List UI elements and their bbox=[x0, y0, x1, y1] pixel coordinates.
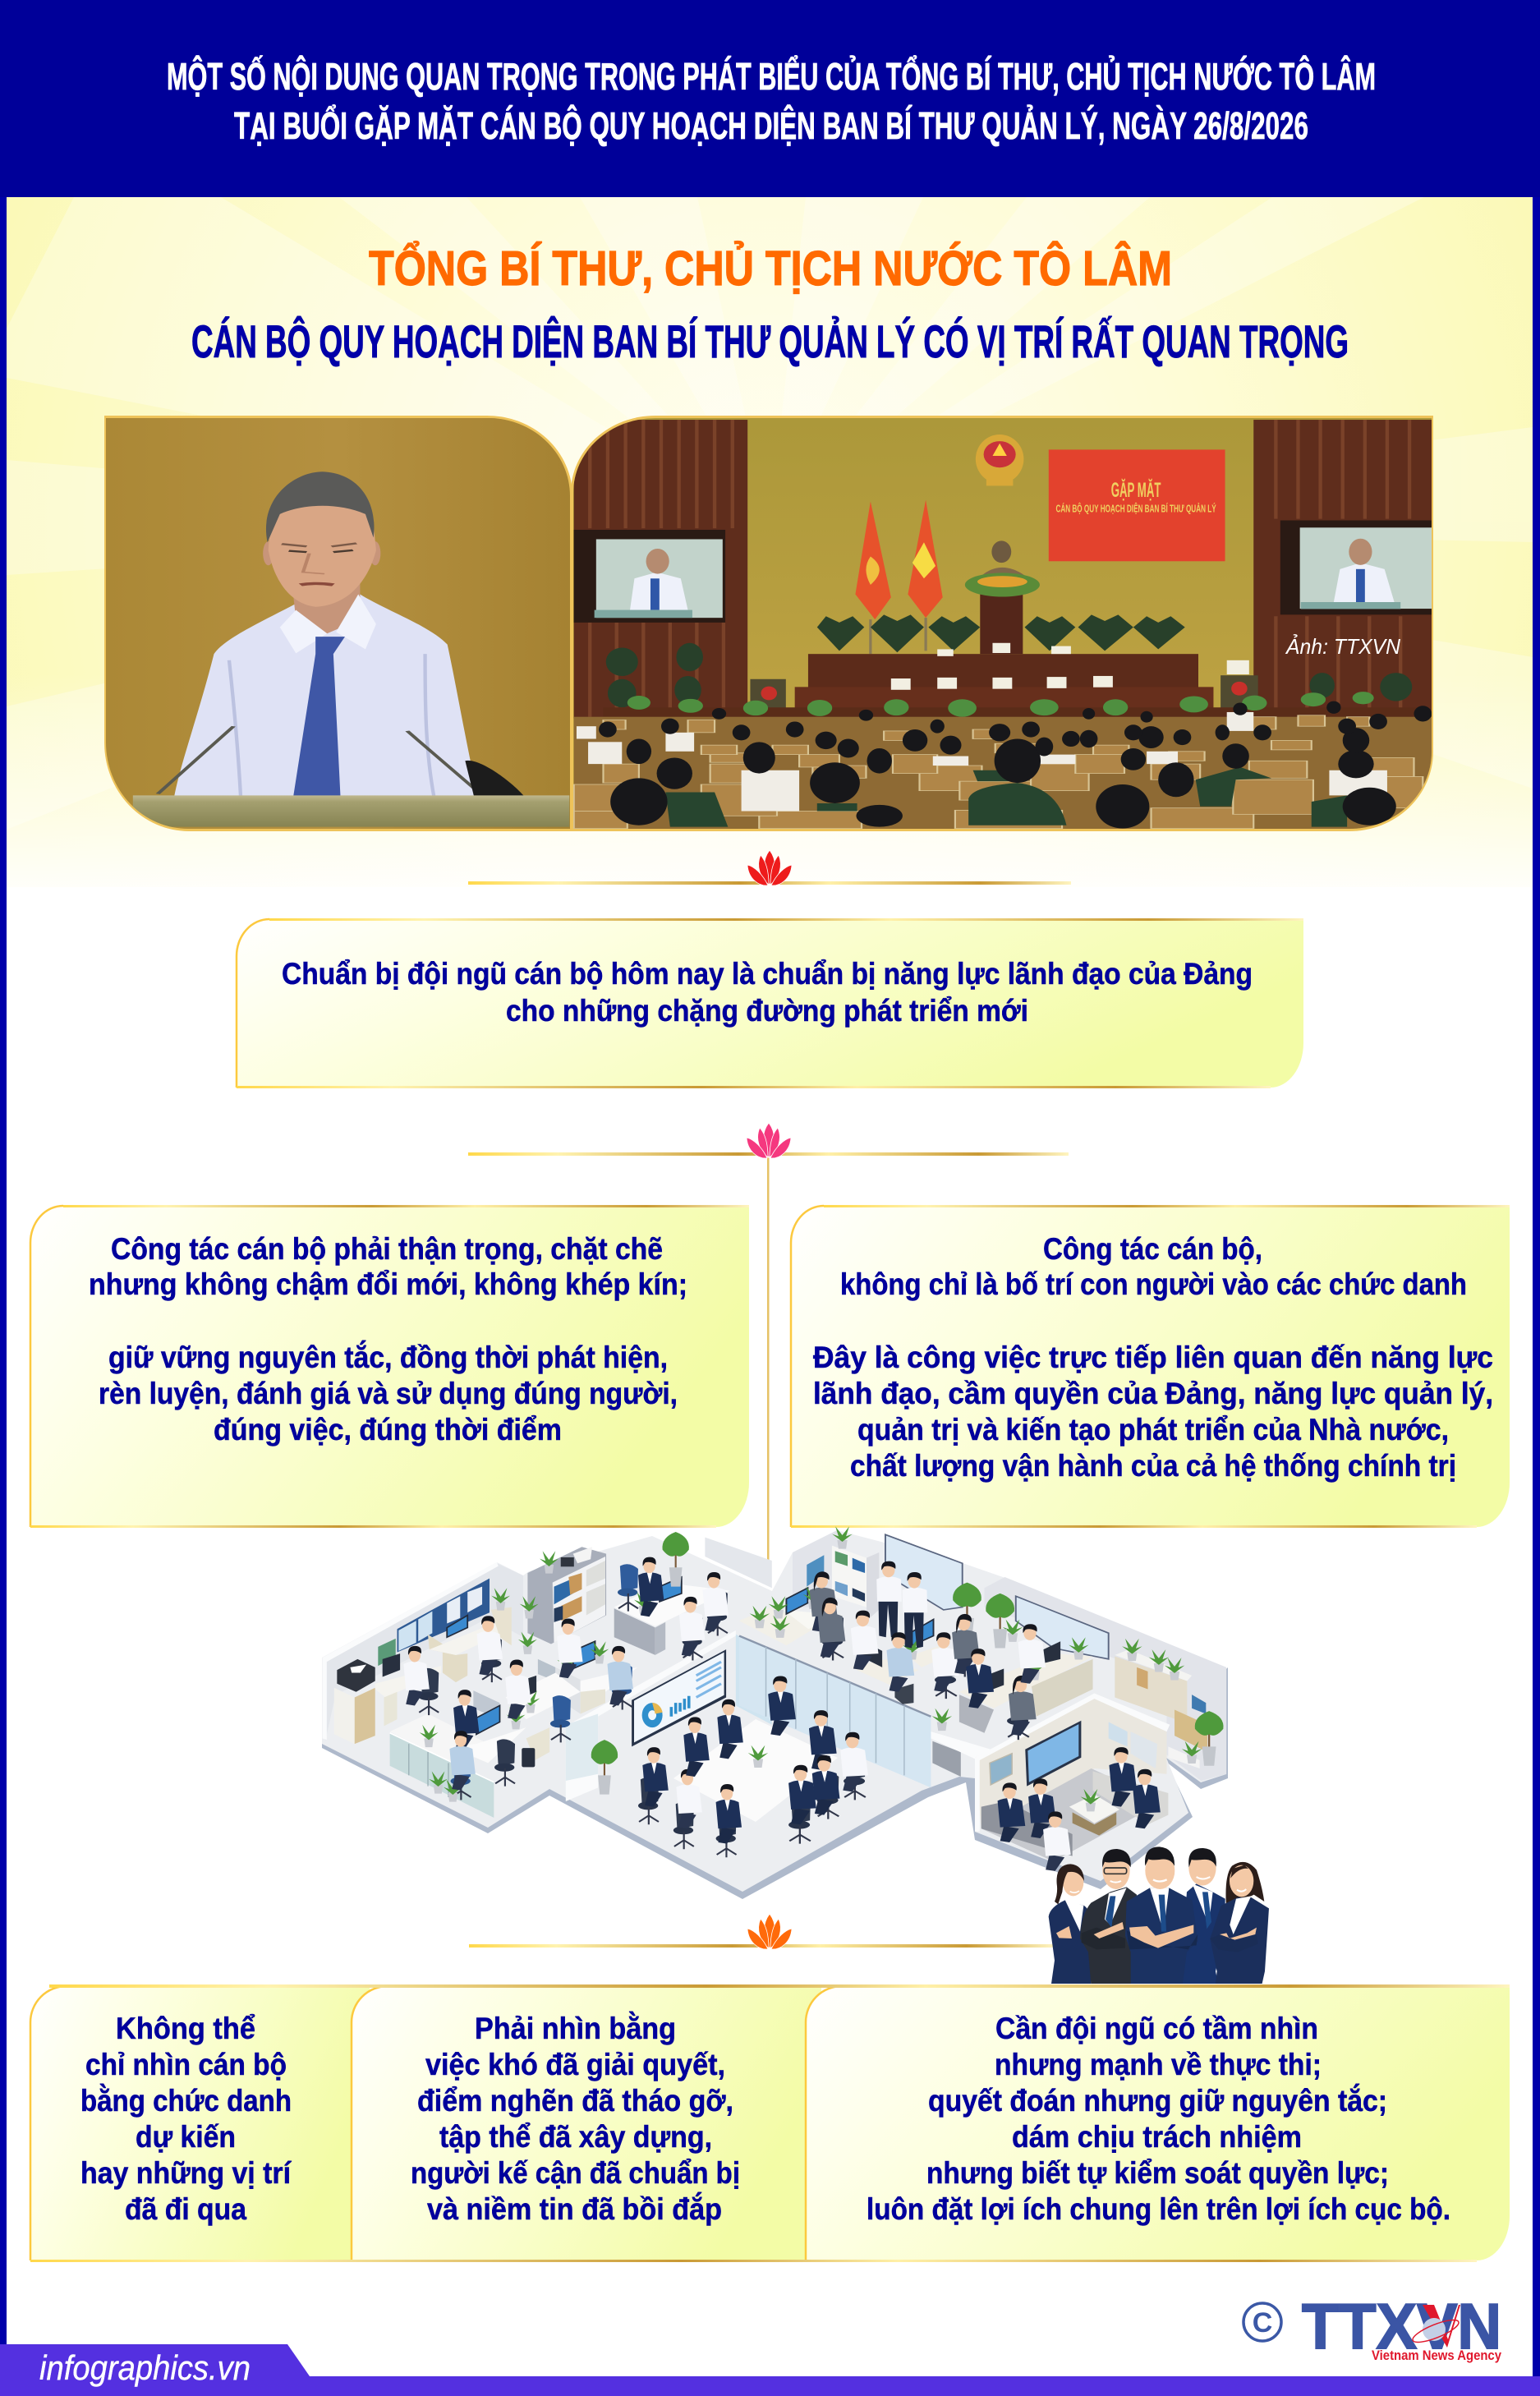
main title: TỔNG BÍ THƯ, CHỦ TỊCH NƯỚC TÔ LÂM bbox=[369, 241, 1172, 296]
lounge shelf bbox=[1115, 1649, 1207, 1768]
back walls bbox=[793, 1530, 1226, 1781]
office floor bbox=[322, 1530, 1226, 1892]
printer and cabinet bbox=[334, 1659, 375, 1744]
man back right bbox=[1180, 1848, 1225, 1984]
man with glasses bbox=[1080, 1849, 1137, 1984]
panel: team needed: nhưng mạnh về thực thi; bbox=[995, 2048, 1322, 2081]
panel: do not judge by title: dự kiến bbox=[136, 2120, 236, 2154]
woman left bbox=[1049, 1864, 1091, 1984]
man center bbox=[1125, 1846, 1198, 1984]
panel: team needed bbox=[806, 1986, 1510, 2260]
footer bar: infographics.vn bbox=[39, 2348, 251, 2387]
panel: left cadre work: đúng việc, đúng thời điểm bbox=[214, 1413, 562, 1446]
filing shelf bbox=[527, 1547, 606, 1644]
left wall bbox=[324, 1563, 523, 1741]
panel: do not judge by title: đã đi qua bbox=[125, 2192, 246, 2226]
lounge room bbox=[975, 1693, 1170, 1861]
logo: copyright mark bbox=[1243, 2303, 1281, 2341]
footer bar bbox=[0, 2344, 1540, 2396]
panel: do not judge by title: bằng chức danh bbox=[80, 2083, 292, 2118]
panel: judge by results: người kế cận đã chuẩn bị bbox=[411, 2156, 740, 2190]
panel: right cadre work: quản trị và kiến tạo phát triển của Nhà nước, bbox=[857, 1413, 1449, 1446]
meeting room staff left bbox=[642, 1699, 743, 1844]
meeting room wall and screen bbox=[566, 1630, 772, 1801]
bust and pillar bbox=[965, 540, 1040, 654]
glass partition bbox=[390, 1733, 494, 1818]
left wing furniture bbox=[322, 1532, 772, 1857]
panel: team needed: Cần đội ngũ có tầm nhìn bbox=[995, 2012, 1318, 2045]
dais bbox=[603, 643, 1418, 720]
panel: left cadre work bbox=[30, 1205, 749, 1528]
wood wall panels bbox=[574, 420, 1437, 719]
panel: left cadre work: rèn luyện, đánh giá và sử dụng đúng người, bbox=[99, 1377, 678, 1410]
right screen bbox=[1280, 521, 1437, 614]
front flowers bbox=[627, 692, 1374, 717]
red banner bbox=[1049, 449, 1225, 561]
glass meeting wall bbox=[739, 1636, 931, 1787]
divider: pink lotus with stem bbox=[468, 1123, 1069, 1561]
panel: judge by results: Phải nhìn bằng bbox=[475, 2011, 676, 2045]
heads bbox=[599, 701, 1432, 829]
monitors bbox=[786, 1588, 934, 1645]
woman right bbox=[1210, 1862, 1269, 1984]
plants bbox=[420, 1532, 767, 1802]
callout: preparing cadres: Chuẩn bị đội ngũ cán bộ hôm nay là chuẩn bị năng lực lãnh đạo của Đảng bbox=[282, 957, 1253, 991]
photo: speaker at podium bbox=[104, 416, 572, 831]
panel: right cadre work: Công tác cán bộ, bbox=[1043, 1232, 1262, 1266]
uniforms bbox=[665, 767, 1347, 827]
work desks bbox=[739, 1607, 1093, 1733]
callout: preparing cadres: cho những chặng đường phát triển mới bbox=[506, 994, 1028, 1028]
divider: red lotus bbox=[468, 850, 1071, 885]
panel: judge by results bbox=[352, 1986, 821, 2260]
photo: assembly hall bbox=[571, 416, 1437, 831]
panel: right cadre work: Đây là công việc trực tiếp liên quan đến năng lực bbox=[813, 1341, 1493, 1374]
red banner: GẶP MẶT bbox=[1111, 478, 1161, 501]
wall screens bbox=[378, 1579, 490, 1666]
staff bbox=[768, 1561, 1161, 1871]
audience floor and desks bbox=[574, 717, 1437, 830]
panel: team needed: dám chịu trách nhiệm bbox=[1012, 2120, 1302, 2154]
meeting table bbox=[673, 1719, 838, 1822]
flags bbox=[855, 500, 943, 654]
illustration: five staff with crossed arms bbox=[1049, 1846, 1269, 1984]
panel: right cadre work: chất lượng vận hành của cả hệ thống chính trị bbox=[850, 1449, 1456, 1483]
divider: orange lotus bbox=[469, 1914, 1054, 1949]
illustration: isometric office bbox=[322, 1526, 1228, 1899]
panel: do not judge by title: hay những vị trí bbox=[80, 2156, 292, 2190]
shirts bbox=[577, 712, 1387, 812]
red banner: CÁN BỘ QUY HOẠCH DIỆN BAN BÍ THƯ QUẢN LÝ bbox=[1055, 502, 1216, 514]
desks bbox=[375, 1607, 637, 1766]
bookshelf bbox=[832, 1546, 879, 1621]
sunburst background panel bbox=[7, 197, 1533, 887]
plants bbox=[748, 1526, 1224, 1811]
photo credit: Ảnh: TTXVN bbox=[1285, 633, 1400, 659]
chairs bbox=[418, 1564, 737, 1857]
state emblem bbox=[976, 435, 1023, 485]
logo: TTXVN: Vietnam News Agency bbox=[1372, 2348, 1501, 2363]
panel: do not judge by title: Không thể bbox=[116, 2012, 255, 2045]
right top desk bbox=[614, 1538, 772, 1655]
chairs bbox=[788, 1613, 1029, 1844]
bottom row gold rules bbox=[30, 1984, 1510, 2262]
panel: team needed: nhưng biết tự kiểm soát quyền lực; bbox=[926, 2156, 1389, 2190]
panel: do not judge by title bbox=[30, 1986, 370, 2260]
panel: right cadre work: không chỉ là bố trí con người vào các chức danh bbox=[840, 1267, 1467, 1301]
floor edge bbox=[322, 1667, 1228, 1899]
right wing furniture bbox=[739, 1526, 1226, 1871]
windows bbox=[885, 1534, 1109, 1659]
panel: do not judge by title: chỉ nhìn cán bộ bbox=[85, 2048, 287, 2081]
monitors bbox=[447, 1577, 682, 1734]
panel: judge by results: và niềm tin đã bồi đắp bbox=[427, 2191, 722, 2226]
header band bbox=[0, 0, 1540, 197]
staff bbox=[403, 1557, 729, 1791]
logo: copyright mark: C bbox=[1253, 2307, 1272, 2339]
panel: judge by results: tập thể đã xây dựng, bbox=[439, 2120, 712, 2154]
panel: left cadre work: giữ vững nguyên tắc, đồng thời phát hiện, bbox=[108, 1340, 668, 1374]
panel: team needed: luôn đặt lợi ích chung lên trên lợi ích cục bộ. bbox=[867, 2192, 1450, 2226]
panel: left cadre work: Công tác cán bộ phải thận trọng, chặt chẽ bbox=[111, 1232, 663, 1266]
main title bbox=[191, 241, 1349, 367]
potted palms bbox=[606, 614, 1412, 707]
logo: TTXVN: TTXVN bbox=[1302, 2290, 1501, 2362]
panel: judge by results: việc khó đã giải quyết, bbox=[425, 2048, 725, 2081]
panel: left cadre work: nhưng không chậm đổi mới, không khép kín; bbox=[89, 1267, 687, 1301]
storage bbox=[932, 1741, 961, 1777]
panel: right cadre work: lãnh đạo, cầm quyền của Đảng, năng lực quản lý, bbox=[813, 1377, 1493, 1410]
panel: judge by results: điểm nghẽn đã tháo gỡ, bbox=[417, 2084, 733, 2118]
panel: right cadre work bbox=[791, 1205, 1510, 1528]
callout: preparing cadres bbox=[237, 918, 1303, 1088]
panel: team needed: quyết đoán nhưng giữ nguyên tắc; bbox=[928, 2083, 1387, 2118]
left screen bbox=[574, 530, 725, 623]
